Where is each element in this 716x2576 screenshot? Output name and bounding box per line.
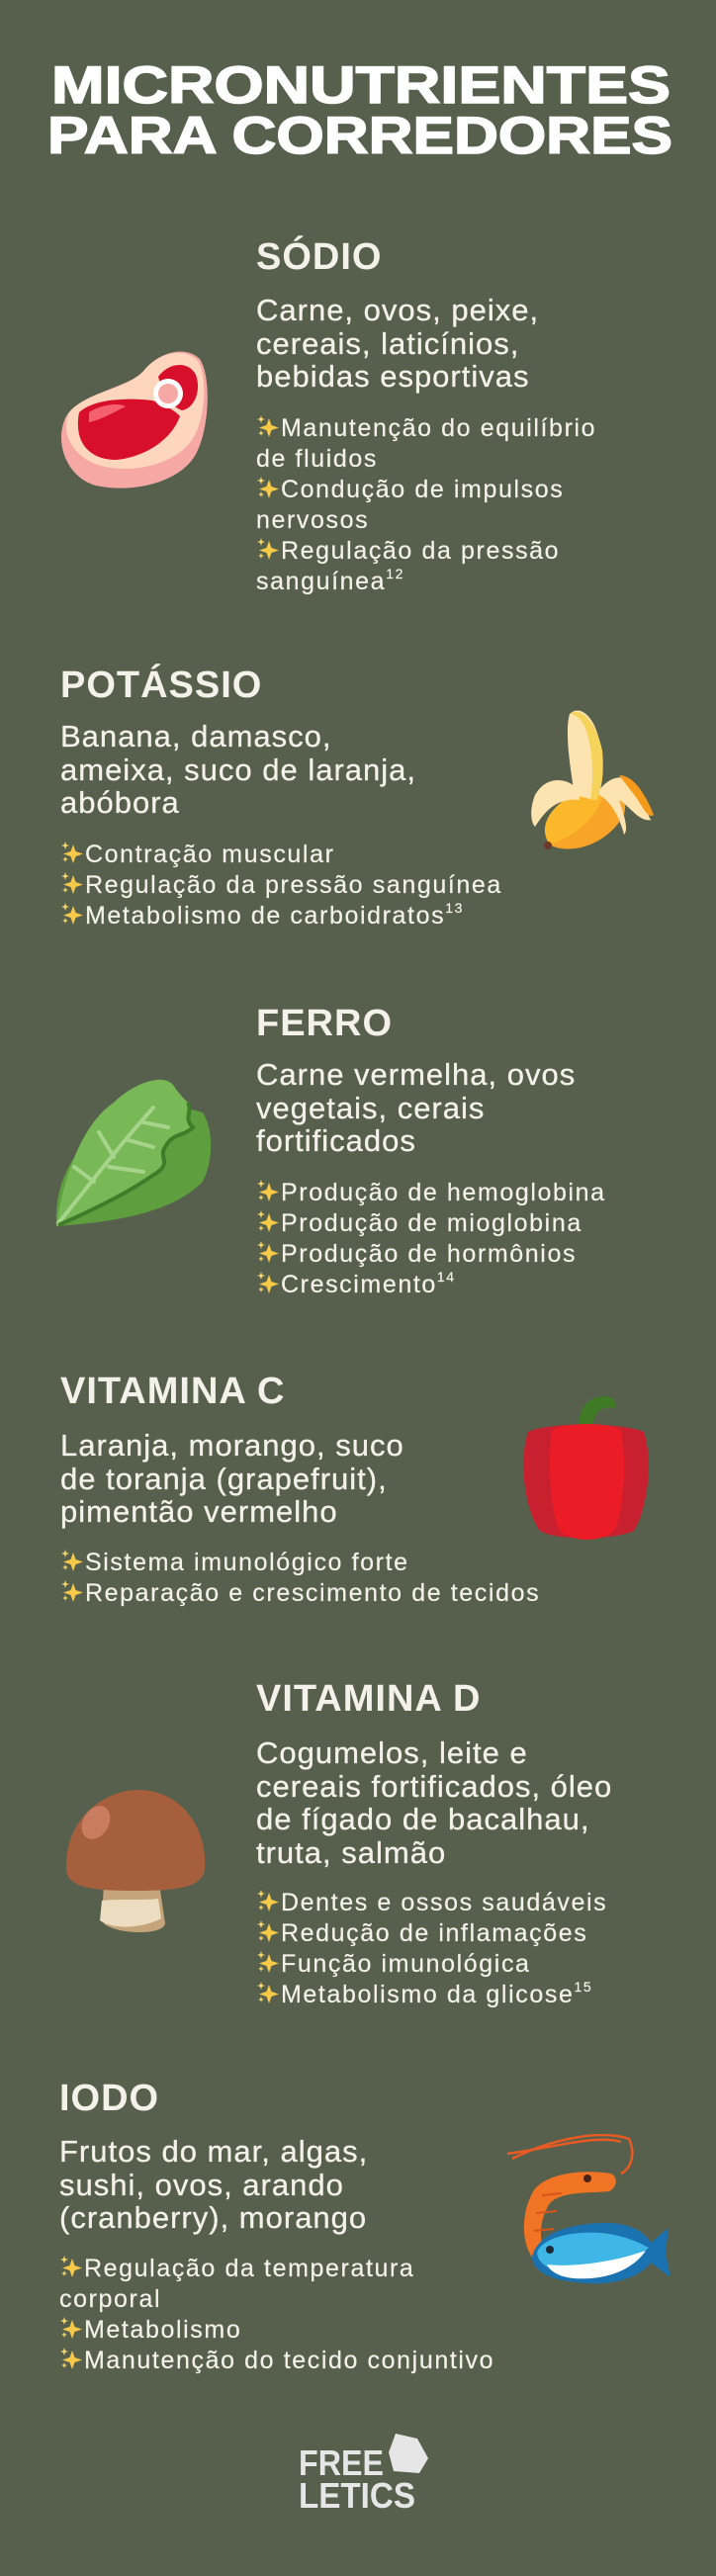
- icon: lettuce: [55, 1080, 212, 1227]
- section: vitamina d: [65, 1678, 612, 2008]
- foods: iodo: [59, 2134, 368, 2235]
- icon: shrimp and fish: [506, 2134, 671, 2284]
- foods: vitamina c: Laranja, morango, suco: [60, 1428, 404, 1463]
- benefits: iodo: Regulação da temperatura: [84, 2255, 414, 2282]
- section: sodio: [61, 235, 596, 595]
- foods: sodio: Carne, ovos, peixe,: [256, 293, 539, 327]
- title: MICRONUTRIENTES: [51, 56, 671, 115]
- benefits: vitamina c: [61, 1549, 540, 1607]
- benefits: sodio: sanguínea12: [256, 566, 404, 595]
- benefits: sodio: de fluidos: [256, 445, 378, 473]
- benefits: sodio: [256, 414, 596, 595]
- foods: vitamina d: Cogumelos, leite e: [256, 1735, 528, 1770]
- benefits: vitamina c: Sistema imunológico forte: [85, 1549, 409, 1576]
- foods: vitamina d: cereais fortificados, óleo: [256, 1768, 612, 1804]
- benefits: sodio: nervosos: [256, 506, 369, 534]
- benefits: vitamina d: [257, 1889, 607, 2008]
- heading: vitamina d: VITAMINA D: [256, 1678, 481, 1720]
- foods: potassio: ameixa, suco de laranja,: [60, 752, 416, 787]
- foods: vitamina d: de fígado de bacalhau,: [256, 1802, 589, 1836]
- foods: ferro: fortificados: [256, 1123, 416, 1158]
- icon: mushroom: [65, 1790, 206, 1932]
- heading: potassio: POTÁSSIO: [60, 665, 262, 706]
- heading: ferro: FERRO: [256, 1003, 393, 1044]
- benefits: iodo: [59, 2255, 494, 2374]
- icon: banana: [531, 710, 654, 849]
- benefits: ferro: Produção de hormônios: [281, 1240, 577, 1268]
- benefits: sodio: Condução de impulsos: [281, 476, 564, 503]
- heading: vitamina c: VITAMINA C: [60, 1371, 285, 1412]
- foods: potassio: Banana, damasco,: [60, 719, 332, 754]
- benefits: vitamina d: Metabolismo da glicose15: [281, 1979, 592, 2008]
- section: vitamina c: [60, 1371, 649, 1607]
- foods: sodio: cereais, laticínios,: [256, 326, 519, 360]
- foods: vitamina c: pimentão vermelho: [60, 1494, 338, 1529]
- foods: ferro: [255, 1057, 576, 1158]
- foods: sodio: bebidas esportivas: [256, 359, 530, 394]
- logo: freeletics: [299, 2434, 428, 2512]
- benefits: vitamina d: Dentes e ossos saudáveis: [281, 1889, 607, 1916]
- benefits: potassio: Regulação da pressão sanguínea: [85, 871, 502, 899]
- title: PARA CORREDORES: [47, 107, 672, 164]
- foods: iodo: sushi, ovos, arando: [59, 2168, 344, 2201]
- benefits: potassio: Metabolismo de carboidratos13: [85, 900, 464, 930]
- section: potassio: [60, 664, 654, 930]
- heading: iodo: IODO: [59, 2078, 159, 2119]
- benefits: vitamina d: Função imunológica: [281, 1950, 531, 1978]
- foods: vitamina c: de toranja (grapefruit),: [60, 1462, 388, 1495]
- foods: potassio: [60, 719, 416, 820]
- benefits: potassio: Contração muscular: [85, 841, 335, 868]
- section: ferro: [55, 1003, 606, 1298]
- foods: ferro: vegetais, cerais: [256, 1090, 485, 1125]
- foods: iodo: (cranberry), morango: [59, 2200, 367, 2235]
- section: iodo: [59, 2078, 671, 2374]
- benefits: ferro: Crescimento14: [281, 1269, 456, 1298]
- title: [47, 56, 672, 164]
- icon: steak: [61, 352, 208, 489]
- benefits: ferro: Produção de hemoglobina: [281, 1179, 606, 1206]
- benefits: ferro: [257, 1179, 606, 1298]
- foods: potassio: abóbora: [60, 785, 180, 820]
- foods: sodio: [256, 293, 539, 394]
- foods: vitamina c: [60, 1428, 404, 1529]
- benefits: iodo: Manutenção do tecido conjuntivo: [84, 2347, 494, 2374]
- icon: red pepper: [523, 1396, 649, 1540]
- foods: iodo: Frutos do mar, algas,: [59, 2134, 368, 2169]
- logo: freeletics: FREE: [299, 2443, 384, 2483]
- benefits: ferro: Produção de mioglobina: [281, 1209, 582, 1237]
- benefits: sodio: Manutenção do equilíbrio: [281, 414, 596, 442]
- benefits: vitamina d: Redução de inflamações: [281, 1919, 587, 1947]
- benefits: vitamina c: Reparação e crescimento de tecidos: [85, 1579, 540, 1607]
- heading: sodio: SÓDIO: [256, 236, 382, 278]
- benefits: iodo: Metabolismo: [84, 2316, 241, 2344]
- foods: vitamina d: truta, salmão: [256, 1835, 446, 1869]
- foods: ferro: Carne vermelha, ovos: [256, 1057, 576, 1092]
- benefits: sodio: Regulação da pressão: [281, 537, 560, 565]
- benefits: iodo: corporal: [59, 2285, 161, 2313]
- foods: vitamina d: [256, 1735, 612, 1869]
- benefits: potassio: [61, 841, 502, 930]
